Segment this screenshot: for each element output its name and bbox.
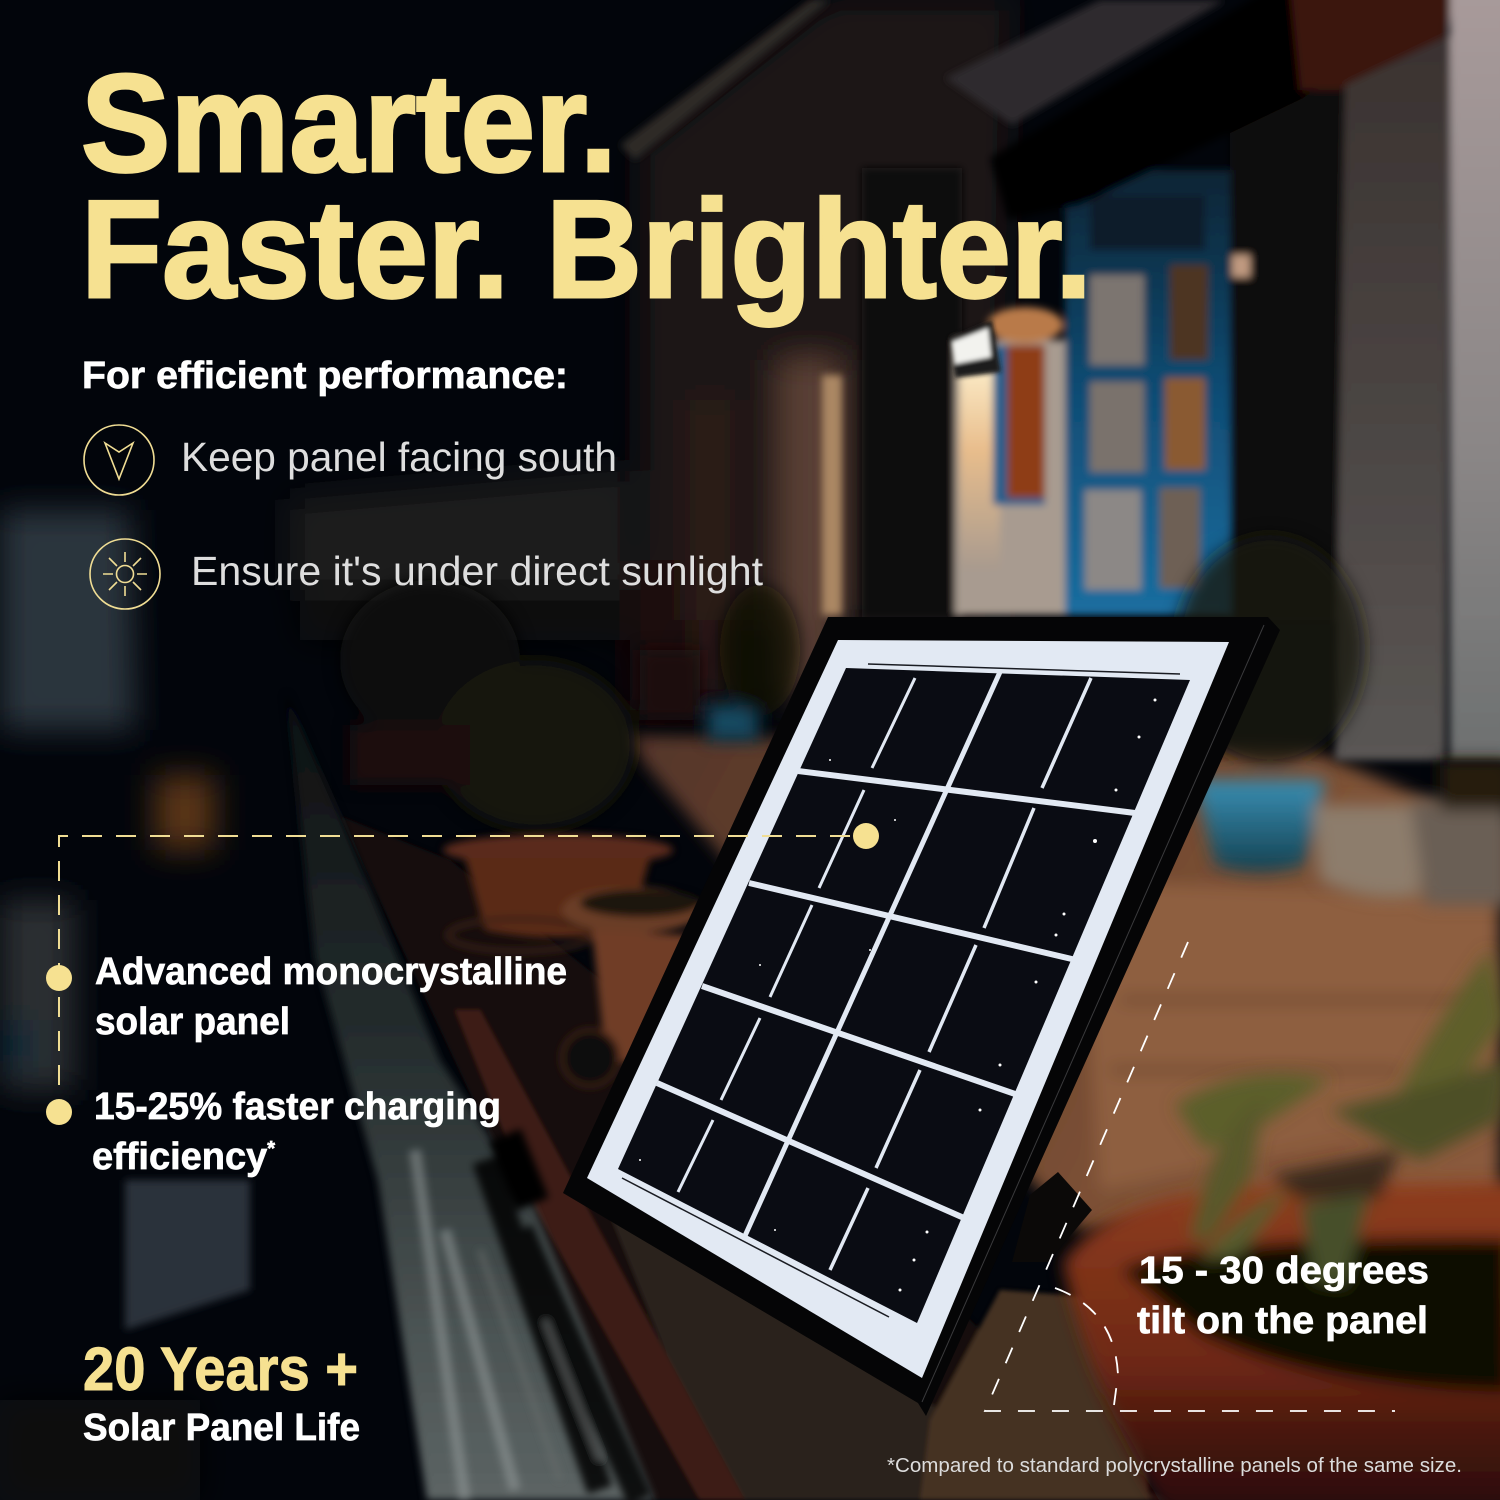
feature: faster charging bbox=[46, 1086, 501, 1178]
panel frame edge highlight bbox=[922, 625, 1264, 1402]
icon: wall floodlight bbox=[950, 320, 1001, 378]
tip: direct sunlight bbox=[90, 539, 764, 609]
icon: sun bbox=[90, 539, 160, 609]
feature: monocrystalline panel bbox=[46, 951, 567, 1043]
title: Faster. Brighter. bbox=[81, 172, 1092, 327]
background: blurred box lower left bbox=[125, 1180, 250, 1330]
background: weathered wall streaks bbox=[415, 1135, 640, 1500]
feature: faster charging: * bbox=[267, 1138, 275, 1160]
background: terrace floor bbox=[620, 735, 1500, 1230]
tilt label bbox=[1137, 1250, 1429, 1342]
panel black frame bbox=[563, 617, 1280, 1416]
panel top and bottom bus wires bbox=[622, 664, 1180, 1317]
panel horizontal cell gaps bbox=[657, 771, 1135, 1218]
subheading: For efficient performance: bbox=[82, 355, 568, 397]
title: Smarter. bbox=[81, 46, 617, 201]
tip: direct sunlight: Ensure it's under direct sunlight bbox=[191, 548, 764, 594]
background: far house bbox=[0, 0, 1010, 1500]
feature: faster charging: 15-25% faster charging bbox=[94, 1086, 501, 1128]
tip: facing south bbox=[84, 425, 617, 495]
panel vertical cell gaps bbox=[678, 672, 1091, 1270]
marker dot bbox=[46, 965, 72, 991]
tilt label: 15 - 30 degrees bbox=[1139, 1250, 1429, 1292]
panel white backing bbox=[587, 640, 1229, 1378]
tilt label: tilt on the panel bbox=[1137, 1300, 1428, 1342]
solar panel bbox=[563, 617, 1280, 1416]
stat: panel life: Solar Panel Life bbox=[83, 1407, 360, 1449]
background: lit facade and windows bbox=[620, 0, 1500, 760]
panel rear bracket bbox=[1012, 1172, 1092, 1262]
tilt angle diagram bbox=[985, 942, 1395, 1411]
background: plants and pots on the far terrace bbox=[340, 535, 1500, 905]
callout marker on panel bbox=[853, 823, 879, 849]
background: terracotta pots beside panel bbox=[443, 834, 704, 1086]
feature: monocrystalline panel: solar panel bbox=[95, 1001, 290, 1043]
feature: monocrystalline panel: Advanced monocrystalline bbox=[95, 951, 567, 993]
icon: compass arrow bbox=[84, 425, 154, 495]
title bbox=[81, 46, 1092, 327]
panel cell texture dots bbox=[639, 698, 1156, 1292]
marker dot bbox=[46, 1099, 72, 1125]
tip: facing south: Keep panel facing south bbox=[181, 434, 617, 480]
background: low wall and ledge bbox=[340, 816, 1170, 1500]
callout connector: yellow dashed line bbox=[59, 836, 850, 1088]
feature: faster charging: efficiency bbox=[92, 1136, 267, 1178]
panel solar cell area bbox=[618, 668, 1190, 1323]
footnote: *Compared to standard polycrystalline panels of the same size. bbox=[887, 1454, 1462, 1477]
stat: panel life bbox=[83, 1335, 360, 1449]
stat: panel life: 20 Years + bbox=[83, 1335, 358, 1403]
background: large foreground pot and plant bbox=[1063, 950, 1500, 1500]
